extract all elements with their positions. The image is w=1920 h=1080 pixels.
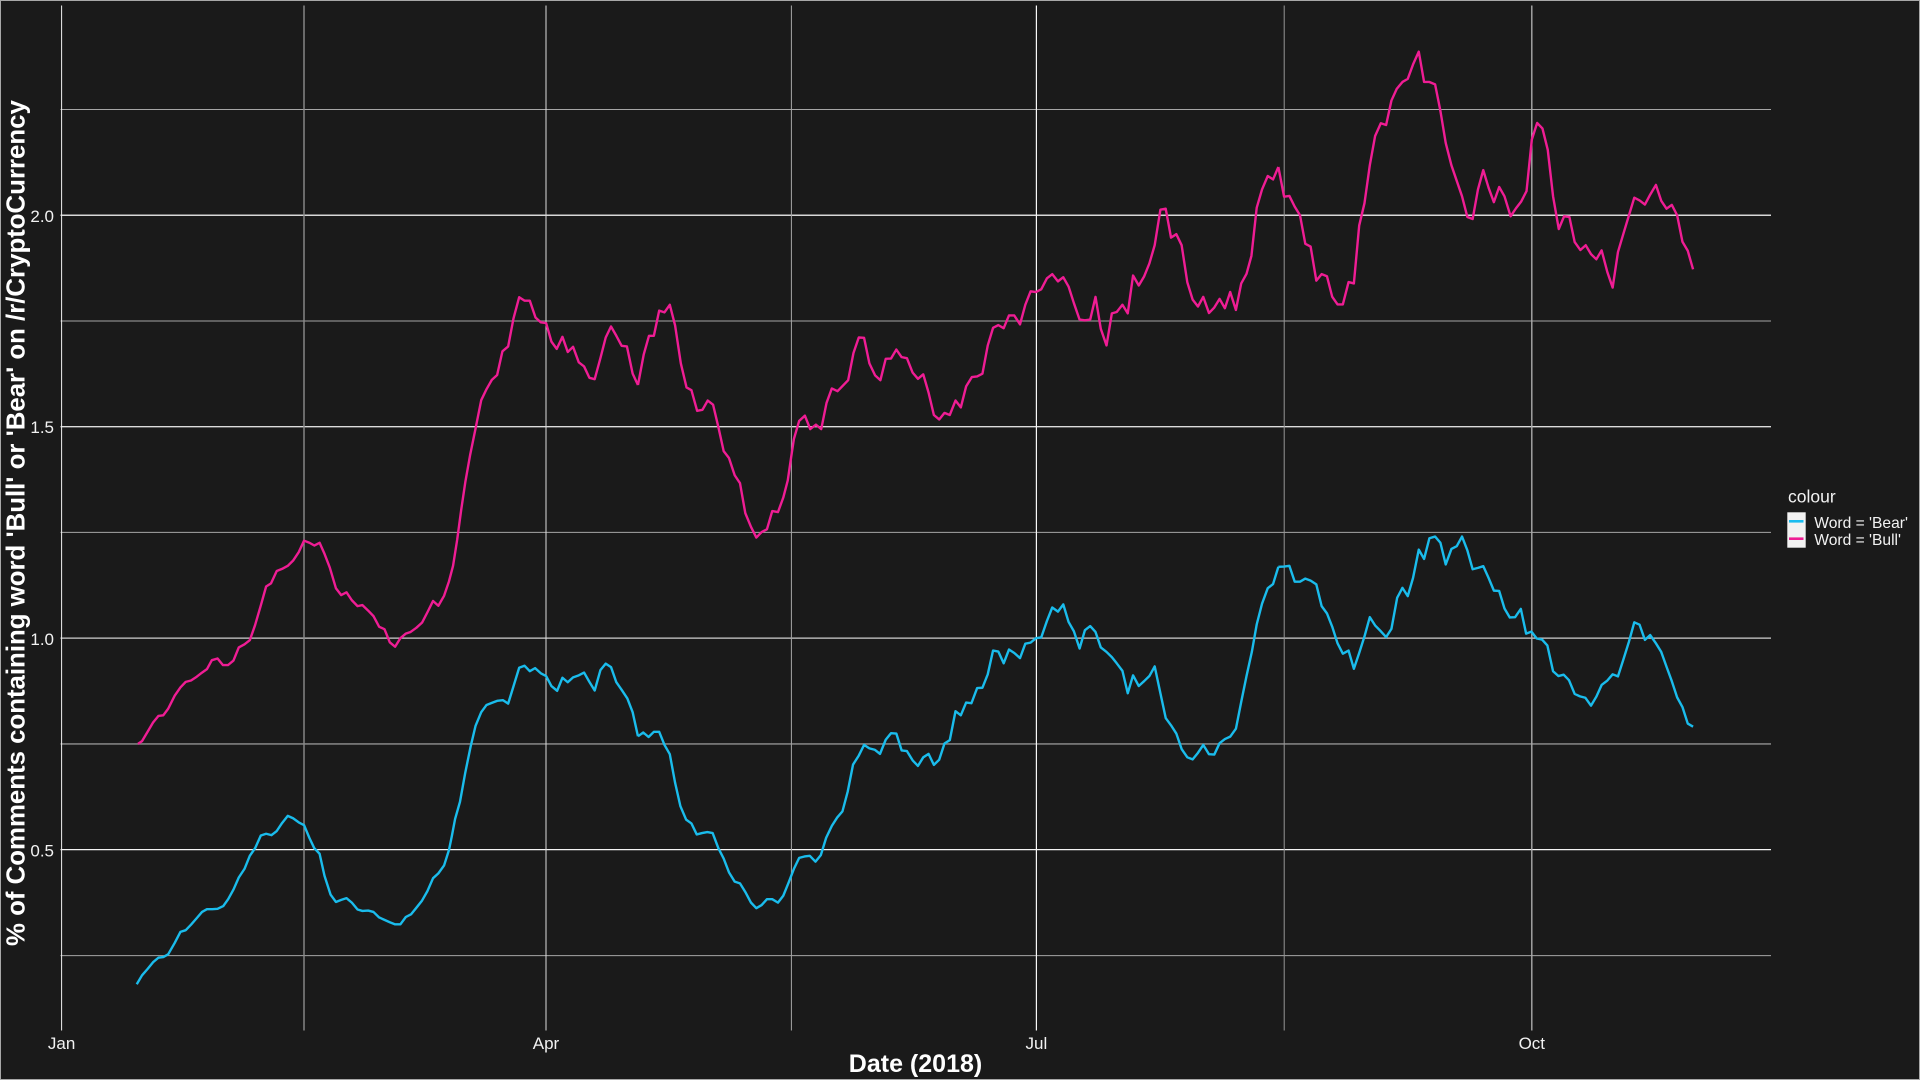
legend title: colour xyxy=(1788,486,1836,506)
y axis tick labels xyxy=(30,207,54,860)
x axis title: Date (2018) xyxy=(849,1050,982,1078)
y axis tick labels: 0.5 xyxy=(30,842,54,860)
legend xyxy=(1787,486,1908,549)
horizontal gridlines xyxy=(60,110,1771,956)
y axis tick labels: 1.0 xyxy=(30,630,54,649)
vertical gridlines xyxy=(62,6,1532,1030)
y axis tick labels: 1.5 xyxy=(30,418,54,437)
legend labels: Word = 'Bear' xyxy=(1814,515,1908,532)
x axis tick labels: Apr xyxy=(533,1034,560,1053)
legend keys xyxy=(1787,512,1806,548)
x axis tick labels: Oct xyxy=(1519,1034,1545,1053)
legend labels: Word = 'Bull' xyxy=(1814,532,1901,549)
line series: Word = 'Bear' xyxy=(137,537,1693,984)
line series: Word = 'Bull' xyxy=(138,52,1693,744)
x axis tick labels: Jul xyxy=(1026,1034,1047,1053)
y axis tick labels: 2.0 xyxy=(30,207,54,226)
legend labels xyxy=(1814,515,1908,549)
x axis tick labels: Jan xyxy=(48,1034,75,1053)
x axis tick labels xyxy=(48,1034,1545,1053)
y axis title: % of Comments containing word 'Bull' or 'Bear' on /r/CryptoCurrency xyxy=(2,100,30,946)
